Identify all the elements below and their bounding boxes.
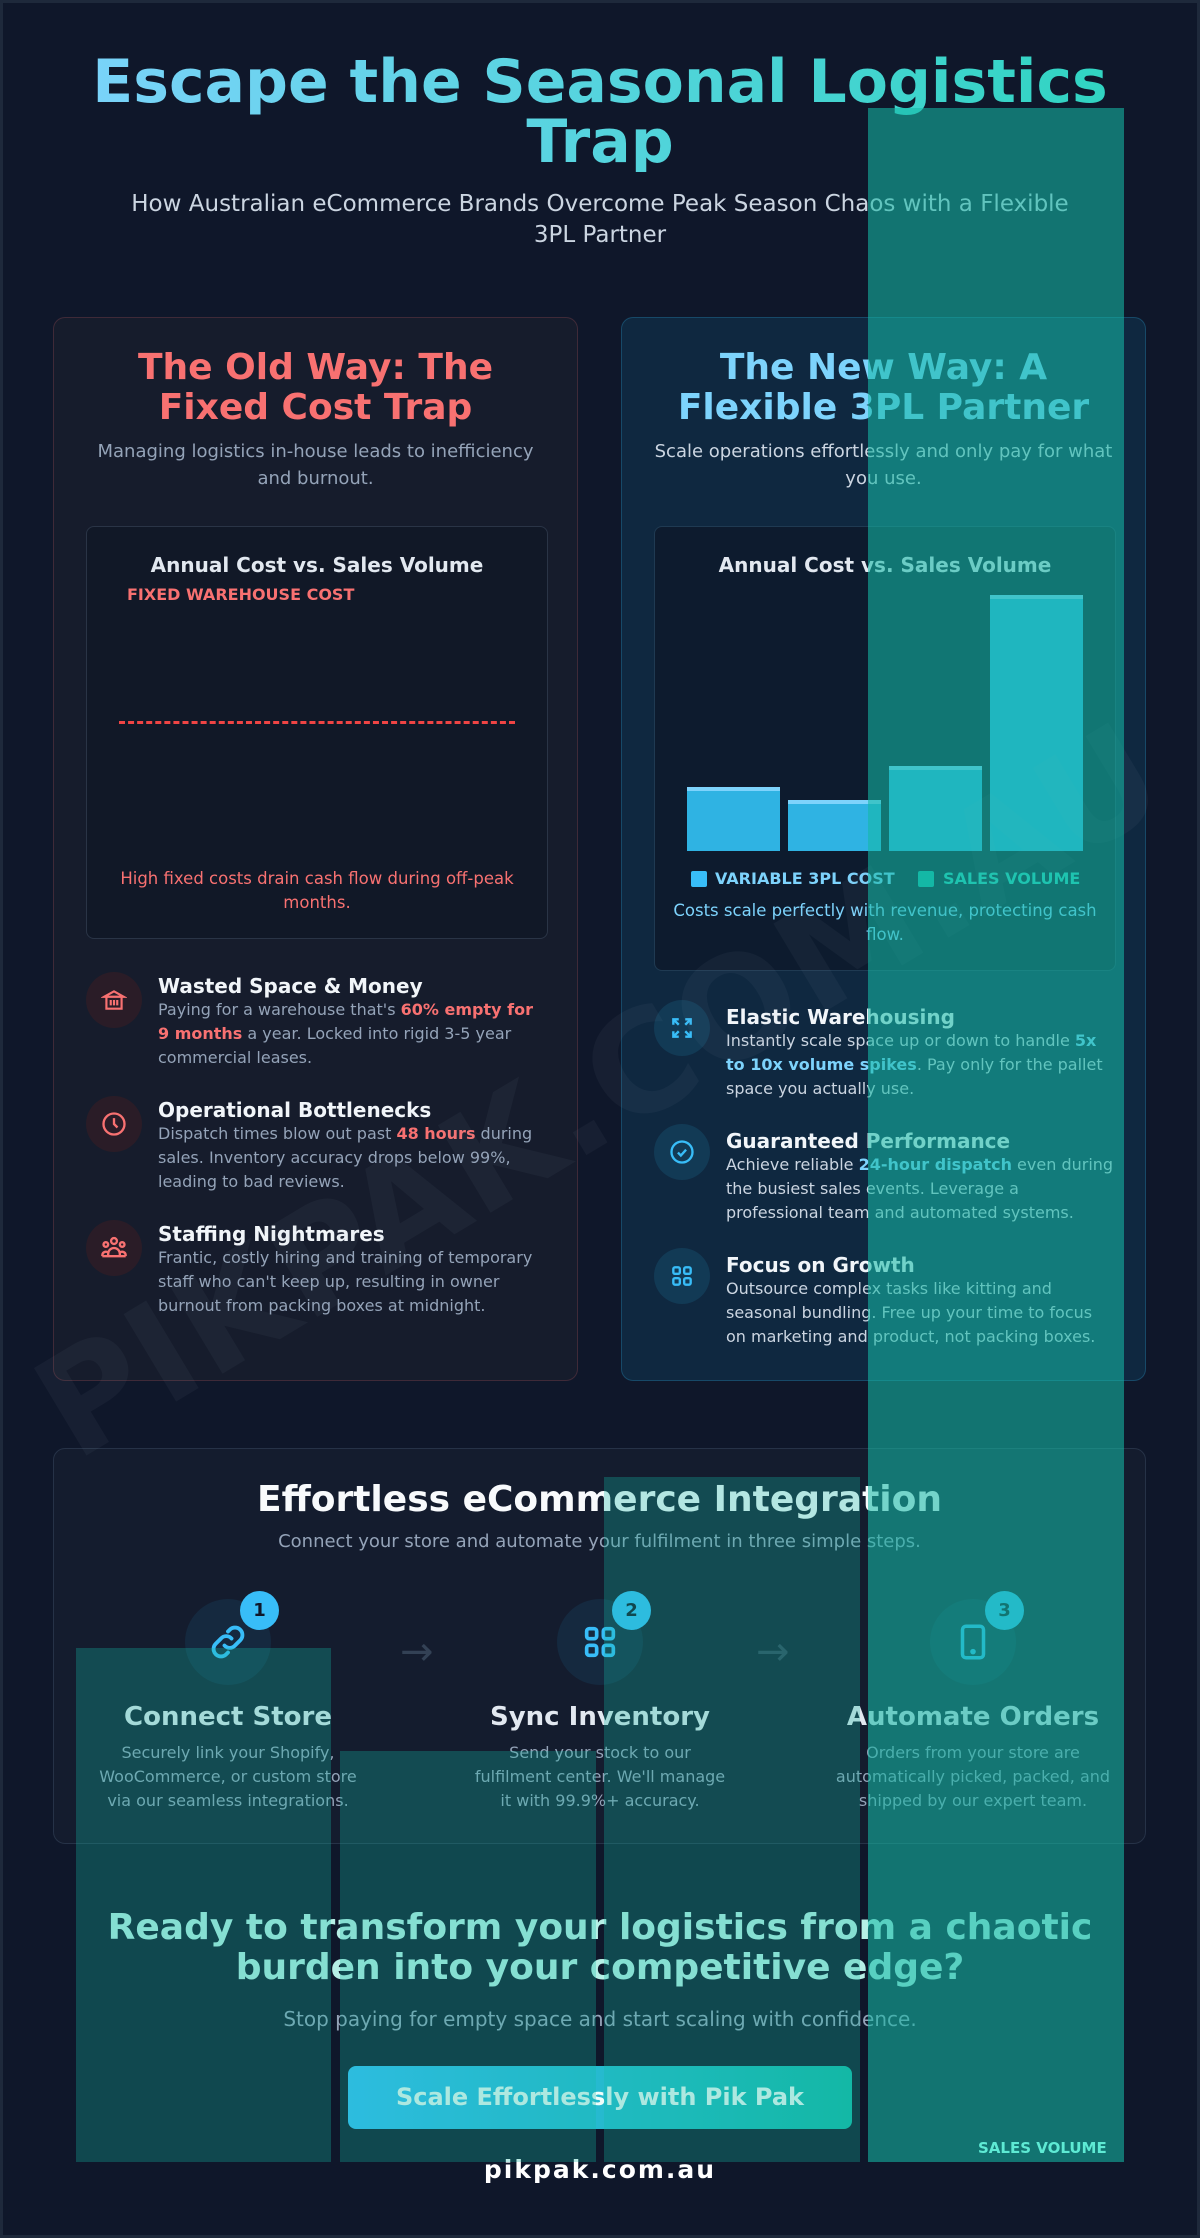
step 1 (99, 1591, 357, 1810)
item: wasted space: Paying for a warehouse that's 60% empty for 9 months a year. Locked into rigid 3-5 year commercial leases. (158, 1000, 533, 1067)
item: bottlenecks (86, 1096, 532, 1191)
heading: old way (138, 347, 493, 428)
legend (691, 869, 1080, 888)
heading: new way: The New Way: A (720, 347, 1047, 388)
icon: grid (654, 1248, 710, 1304)
heading: old way: The Old Way: The (138, 347, 493, 388)
icon: expand (654, 1000, 710, 1056)
step 2: Send your stock to our (509, 1743, 691, 1762)
item: staffing: Staffing Nightmares (158, 1222, 385, 1246)
item: elastic (654, 1000, 1103, 1098)
legend: SALES VOLUME (943, 869, 1080, 888)
item: wasted space: Wasted Space & Money (158, 974, 423, 998)
caption: High fixed costs drain cash flow during off-peak months. (120, 869, 514, 912)
title (40, 52, 1160, 172)
item: staffing (86, 1220, 532, 1315)
legend: VARIABLE 3PL COST (715, 869, 895, 888)
label: fixed warehouse cost: FIXED WAREHOUSE COST (127, 585, 354, 604)
item: bottlenecks: Dispatch times blow out past 48 hours during sales. Inventory accuracy drops below 99%, leading to bad reviews. (158, 1124, 532, 1191)
item: staffing: Frantic, costly hiring and training of temporary staff who can't keep up, resulting in owner burnout from packing boxes at midnight. (158, 1248, 532, 1315)
step 2: 2 (625, 1600, 638, 1621)
chart: variable cost bars: Annual Cost vs. Sales Volume (719, 553, 1051, 577)
panel: new way (621, 317, 1146, 1381)
item: growth: Focus on Growth (726, 1253, 915, 1277)
icon: people (86, 1220, 142, 1276)
panel: old way (53, 317, 578, 1381)
footer url: pikpak.com.au (484, 2155, 716, 2184)
caption: Costs scale perfectly with revenue, protecting cash flow. (673, 901, 1097, 944)
heading: new way: Flexible 3PL Partner (678, 387, 1089, 428)
label: sales volume: SALES VOLUME (978, 2139, 1107, 2157)
chart: fixed cost: Annual Cost vs. Sales Volume (151, 553, 483, 577)
item: elastic: Elastic Warehousing (726, 1005, 955, 1029)
step 1: Securely link your Shopify, WooCommerce, or custom store via our seamless integrations. (99, 1743, 357, 1810)
item: bottlenecks: Operational Bottlenecks (158, 1098, 431, 1122)
step 3: 3 (998, 1600, 1011, 1621)
item: growth (654, 1248, 1095, 1346)
arrow: → (400, 1629, 434, 1675)
text: integration subtitle: Connect your store and automate your fulfilment in three simple steps. (278, 1531, 921, 1552)
item: elastic: Instantly scale space up or down to handle 5x to 10x volume spikes. Pay only for the pallet space you actually use. (726, 1031, 1103, 1098)
CTA button (348, 2066, 852, 2129)
step 3 (836, 1591, 1110, 1810)
step 2: it with 99.9%+ accuracy. (500, 1791, 700, 1810)
heading: new way (678, 347, 1089, 428)
arrow: → (756, 1629, 790, 1675)
step 1: Connect Store (124, 1702, 332, 1732)
icon: bank (86, 972, 142, 1028)
title: Trap (526, 107, 674, 177)
CTA button: Scale Effortlessly with Pik Pak (396, 2083, 804, 2111)
icon: clock (86, 1096, 142, 1152)
heading: integration: Effortless eCommerce Integration (257, 1479, 942, 1520)
text: new way description: Scale operations effortlessly and only pay for what you use. (655, 441, 1112, 489)
icon: check (654, 1124, 710, 1180)
step 2: Sync Inventory (490, 1702, 710, 1732)
item: performance: Guaranteed Performance (726, 1129, 1010, 1153)
step 3: Automate Orders (847, 1702, 1099, 1732)
chart: fixed cost (86, 526, 548, 939)
heading: old way: Fixed Cost Trap (159, 387, 472, 428)
item: performance (654, 1124, 1113, 1222)
step 3: Orders from your store are automatically picked, packed, and shipped by our expert team. (836, 1743, 1110, 1810)
item: wasted space (86, 972, 533, 1067)
subtitle: 3PL Partner (534, 222, 666, 248)
watermark: PIKPAK.COM.AU (9, 692, 1191, 1491)
subtitle (131, 191, 1069, 248)
text: old way description: Managing logistics in-house leads to inefficiency and burnout. (98, 441, 534, 489)
title: Escape the Seasonal Logistics (92, 47, 1108, 117)
item: performance: Achieve reliable 24-hour dispatch even during the busiest sales events. Leverage a professional team and automated systems. (726, 1155, 1113, 1222)
step 2 (475, 1591, 725, 1810)
CTA heading: Ready to transform your logistics from a chaotic burden into your competitive edge? (108, 1907, 1092, 1988)
CTA subtitle: Stop paying for empty space and start scaling with confidence. (283, 2007, 917, 2031)
chart: variable cost bars (654, 526, 1116, 971)
panel: integration (53, 1448, 1146, 1844)
step 2: fulfilment center. We'll manage (475, 1767, 725, 1786)
subtitle: How Australian eCommerce Brands Overcome Peak Season Chaos with a Flexible (131, 191, 1069, 217)
dashed line (119, 721, 515, 724)
item: growth: Outsource complex tasks like kitting and seasonal bundling. Free up your time to focus on marketing and product, not packing boxes. (726, 1279, 1095, 1346)
step 1: 1 (253, 1600, 266, 1621)
